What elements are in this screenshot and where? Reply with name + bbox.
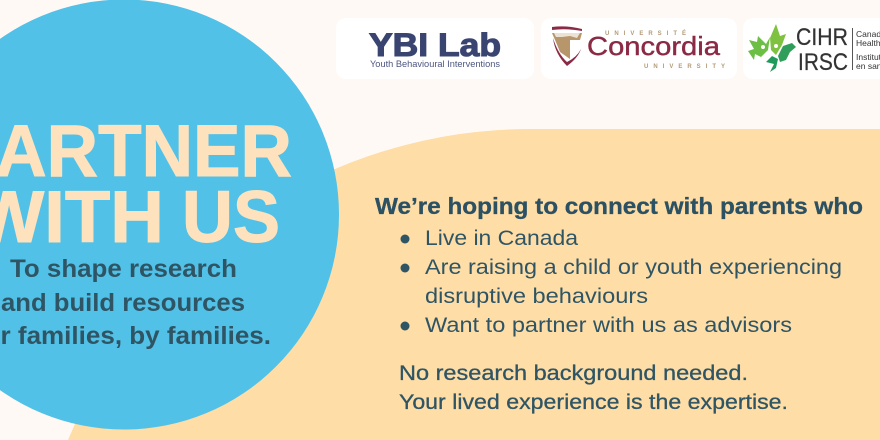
bullet 3: Want to partner with us as advisors	[425, 313, 792, 337]
logo card: Concordia: Concordia	[587, 31, 721, 61]
bullet 2: disruptive behaviours	[425, 284, 648, 308]
subtitle text block	[0, 255, 271, 350]
closing statement: No research background needed.	[399, 361, 748, 385]
title: partner with us: US	[182, 177, 280, 258]
logo card: CIHR IRSC	[743, 18, 880, 79]
icon: Concordia shield	[552, 26, 582, 66]
bullet list	[400, 226, 842, 337]
logo card: YBI Lab: YBI Lab	[369, 27, 501, 63]
logo card: Concordia: UNIVERSITÉ	[605, 29, 686, 37]
icon: green maple leaf	[748, 24, 796, 72]
title: partner with us	[0, 111, 292, 258]
closing statement: Your lived experience is the expertise.	[399, 390, 788, 414]
closing statement	[399, 361, 788, 414]
panel: peach background shape	[68, 129, 880, 440]
logo card: YBI Lab: Youth Behavioural Interventions	[370, 59, 500, 70]
logo card: YBI Lab	[336, 18, 534, 79]
logo card: CIHR IRSC: CIHR	[796, 24, 848, 51]
logo card: CIHR IRSC: IRSC	[798, 49, 848, 76]
heading: who we want to connect with: We’re hoping to connect with parents who	[375, 193, 863, 219]
logo card: Concordia	[541, 18, 737, 79]
subtitle text block: To shape research	[10, 255, 237, 283]
bullet 2	[400, 255, 842, 308]
bullet 1: Live in Canada	[425, 226, 578, 250]
logo card: Concordia: UNIVERSITY	[644, 64, 725, 70]
subtitle text block: and build resources	[1, 289, 245, 317]
panel: blue circle	[0, 0, 339, 430]
bullet 2: Are raising a child or youth experiencing	[425, 255, 842, 279]
